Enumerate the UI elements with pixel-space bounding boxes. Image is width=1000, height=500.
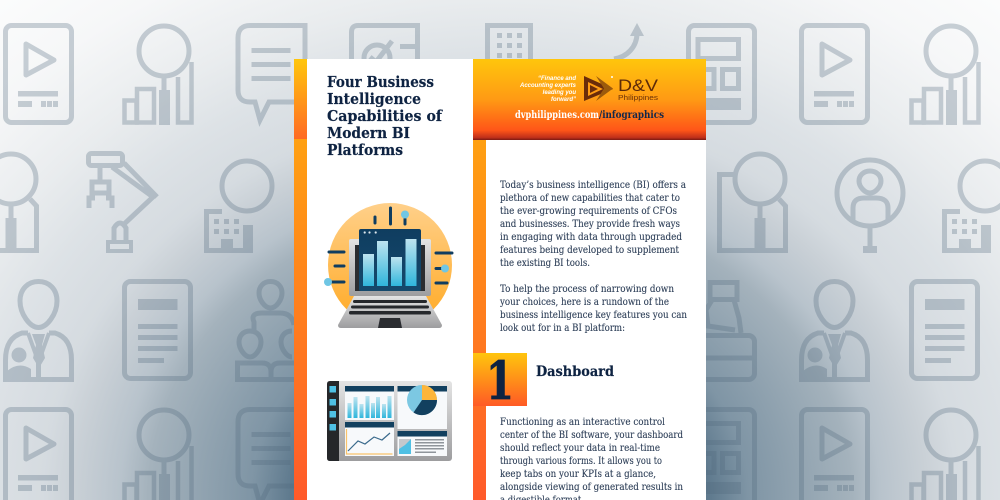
- left accent strip: [294, 59, 307, 500]
- second paragraph: your choices, here is a rundown of the: [499, 297, 669, 308]
- icon: layout document row four: [688, 410, 754, 500]
- tagline quote: forward”: [551, 97, 576, 103]
- header band: [473, 59, 706, 140]
- intro paragraph: the existing BI tools.: [500, 258, 590, 269]
- title: Capabilities of: [327, 107, 443, 125]
- icon: speech bubble: [238, 26, 305, 120]
- title: Four Business: [327, 73, 434, 91]
- icon: magnifier document left: [0, 154, 36, 251]
- icon: video document: [6, 26, 72, 122]
- title: [327, 73, 443, 159]
- second paragraph: business intelligence key features you can: [500, 310, 687, 321]
- dashboard paragraph: alongside viewing of generated results in: [500, 482, 683, 493]
- dashboard paragraph: should reflect your data in real-time: [500, 443, 660, 454]
- icon: businessperson right: [802, 282, 868, 382]
- logo: D&V Philippines: [584, 76, 659, 102]
- icon: text document: [124, 282, 190, 378]
- section heading: Dashboard: [536, 364, 615, 380]
- website url: dvphilippines.com: [515, 110, 599, 121]
- icon: building: [488, 26, 530, 60]
- icon: person in magnifier: [837, 160, 903, 253]
- intro paragraph: [500, 180, 686, 269]
- panel: infographic page: [294, 59, 706, 500]
- icon: video document row four: [6, 410, 72, 500]
- dashboard paragraph: keep tabs on your KPIs at a glance,: [500, 469, 656, 480]
- dashboard paragraph: Functioning as an interactive control: [500, 417, 665, 428]
- number badge: 1: [486, 351, 514, 412]
- icon: speech bubble row four: [238, 410, 305, 500]
- title: Platforms: [327, 141, 403, 159]
- icon: magnifier over bar chart: [124, 26, 192, 125]
- number badge: [473, 351, 527, 412]
- icon: text document right: [912, 282, 978, 378]
- dashboard paragraph: [500, 417, 684, 500]
- tagline quote: leading you: [543, 90, 576, 96]
- title: Intelligence: [327, 90, 421, 108]
- intro paragraph: and businesses. They provide fresh ways: [500, 219, 680, 230]
- tagline quote: Accounting experts: [519, 83, 577, 89]
- icon: growth arrow: [614, 23, 644, 59]
- icon: layout document: [688, 26, 754, 122]
- tagline quote: [519, 76, 577, 103]
- icon: video document row four right: [802, 410, 868, 500]
- icon: magnifier building: [206, 161, 272, 251]
- website url: [515, 110, 664, 121]
- icon: magnifier document right: [720, 154, 786, 251]
- second paragraph: To help the process of narrowing down: [500, 284, 674, 295]
- title: Modern BI: [327, 124, 410, 142]
- icon: team: [235, 282, 296, 380]
- icon: dashboard screen: [327, 381, 452, 461]
- second paragraph: [499, 284, 687, 334]
- website url: /infographics: [599, 110, 664, 121]
- icon: robot arm: [88, 154, 157, 251]
- icon: laptop with bar chart: [324, 203, 452, 328]
- icon: checklist document: [352, 26, 420, 71]
- second paragraph: look out for in a BI platform:: [500, 323, 625, 334]
- centre accent strip: [473, 139, 486, 500]
- logo: D&V Philippines: D&V: [618, 76, 659, 95]
- icon: businessperson: [6, 282, 72, 382]
- icon: hand and stack: [700, 282, 755, 380]
- tagline quote: “Finance and: [538, 76, 576, 82]
- logo: D&V Philippines: Philippines: [618, 93, 658, 102]
- icon: magnifier building right: [944, 161, 1000, 251]
- intro paragraph: in engaging with data through upgraded: [500, 232, 683, 243]
- icon: video document right: [802, 26, 868, 122]
- intro paragraph: Today’s business intelligence (BI) offers a: [500, 180, 686, 191]
- intro paragraph: features being developed to supplement: [500, 245, 679, 256]
- intro paragraph: the ever-growing requirements of CFOs: [500, 206, 677, 217]
- dashboard paragraph: center of the BI software, your dashboard: [500, 430, 684, 441]
- dashboard paragraph: through various forms. It allows you to: [500, 456, 662, 467]
- icon: magnifier chart row four: [124, 410, 192, 500]
- icon: magnifier chart right: [912, 26, 978, 125]
- icon: magnifier chart row four right: [912, 410, 978, 500]
- intro paragraph: plethora of new capabilities that cater to: [500, 193, 680, 204]
